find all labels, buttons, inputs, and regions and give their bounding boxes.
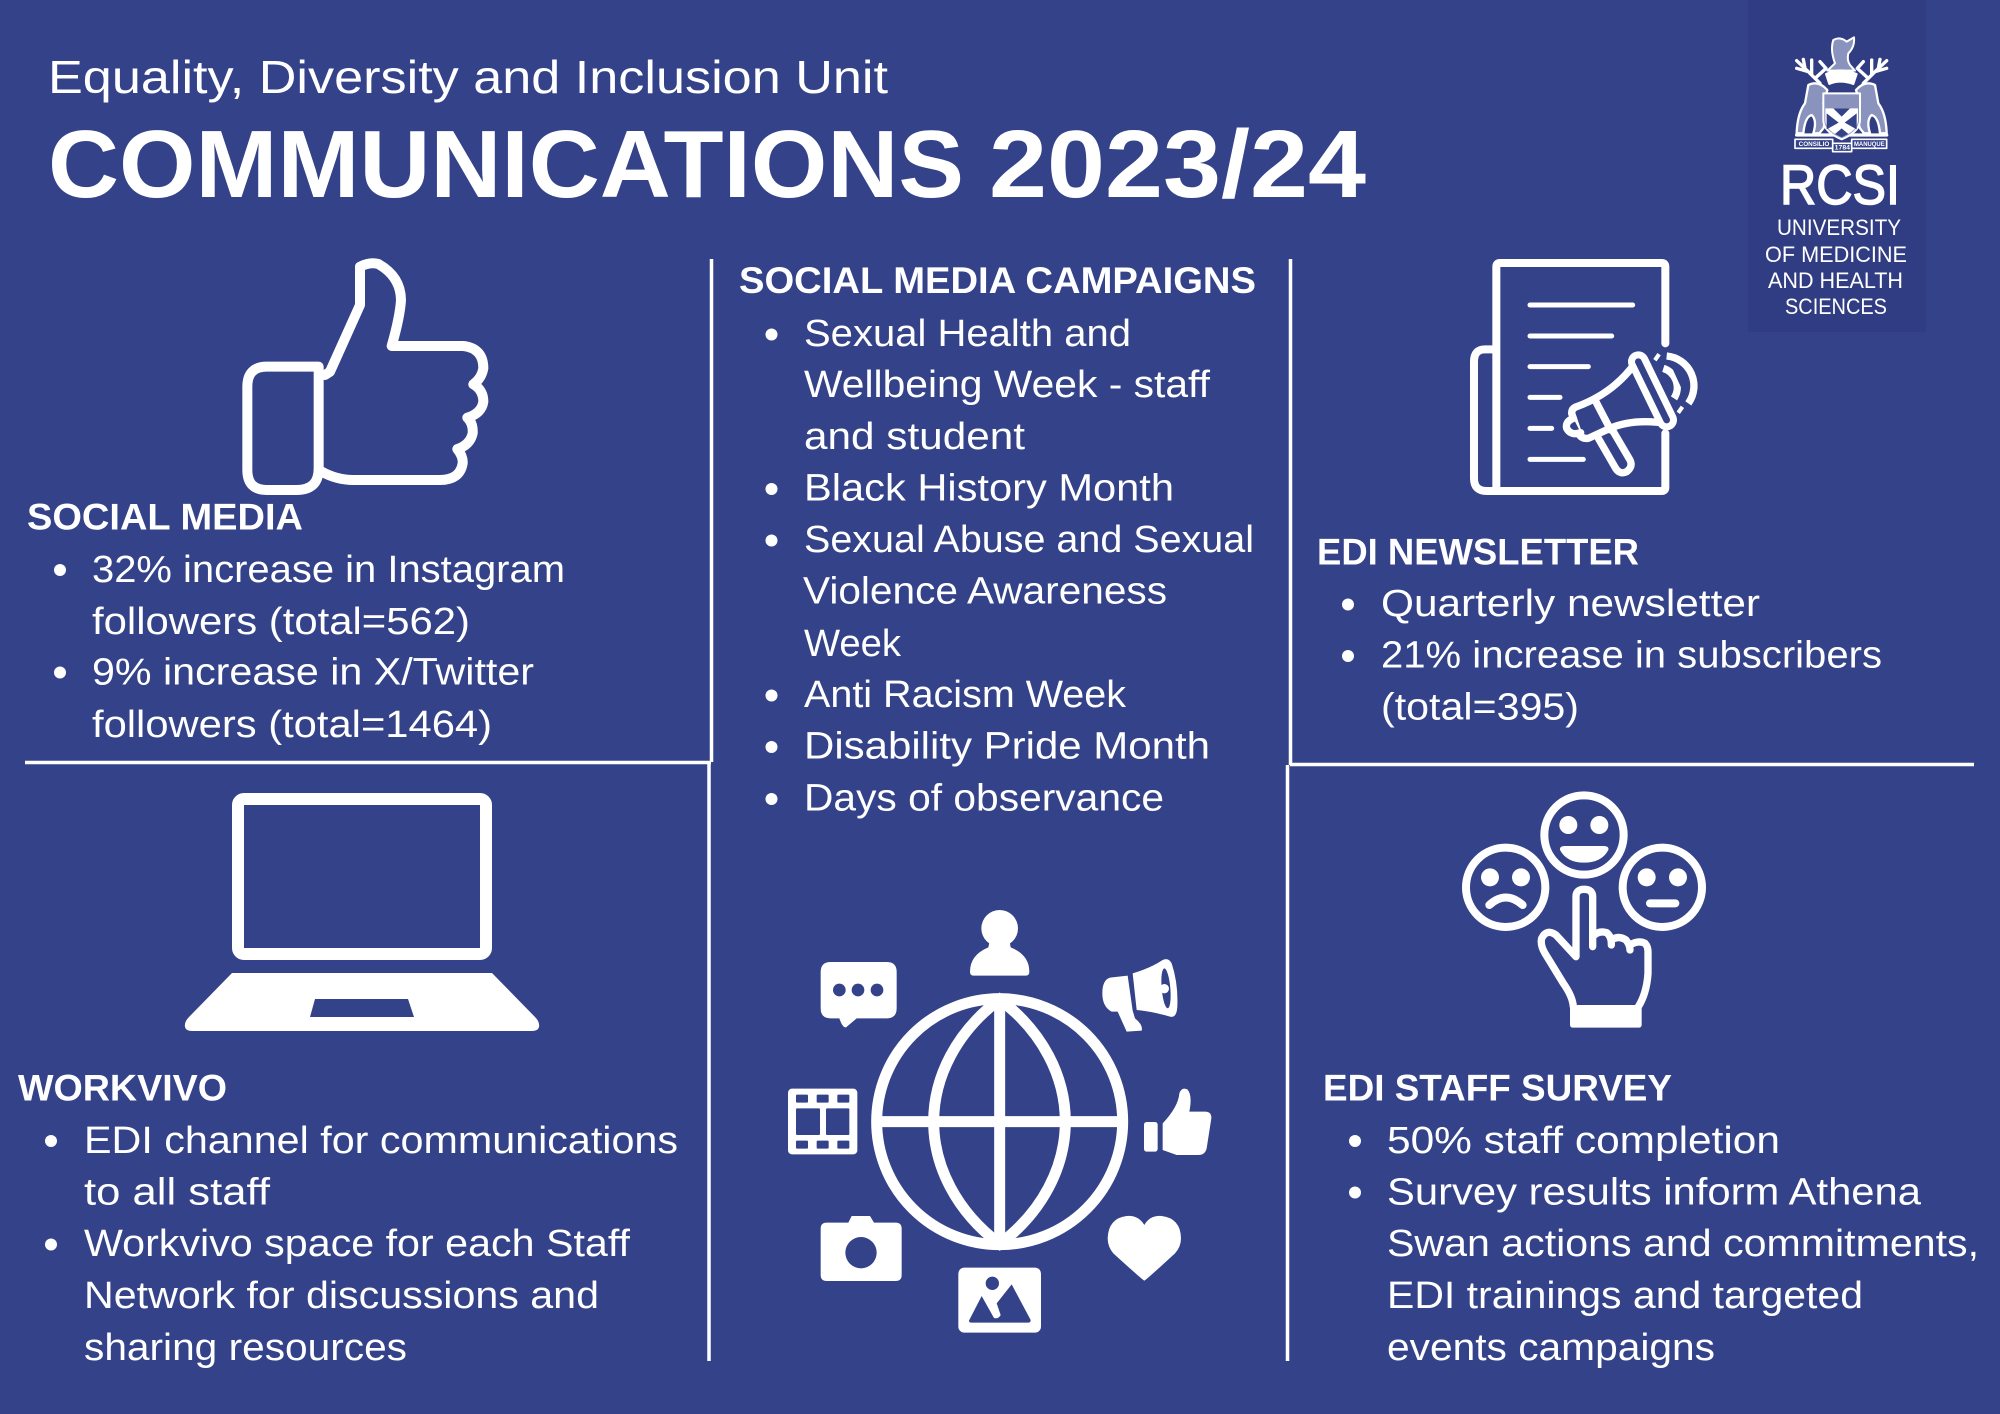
list: campaigns: and student	[804, 416, 1025, 458]
list: campaigns: Wellbeing Week - staff	[804, 364, 1210, 406]
list: newsletter: Quarterly newsletter	[1381, 583, 1760, 625]
list: survey: 50% staff completion	[1387, 1120, 1780, 1162]
icon: laptop	[185, 799, 539, 1031]
icon: RCSI crest	[1795, 37, 1887, 152]
list: campaigns: Disability Pride Month	[804, 726, 1210, 768]
list: campaigns: Days of observance	[804, 778, 1164, 820]
title block	[48, 51, 1366, 218]
icon: RCSI crest: MANUQUE	[1854, 141, 1885, 148]
icon: globe	[877, 999, 1123, 1245]
RCSI logo panel	[1748, 0, 1926, 332]
main title: COMMUNICATIONS	[48, 111, 964, 218]
list: newsletter: 21% increase in subscribers	[1381, 634, 1882, 676]
panel: social media campaigns	[739, 260, 1256, 1333]
icon: film strip	[788, 1089, 857, 1154]
icon: heart	[1108, 1216, 1181, 1281]
list: workvivo: EDI channel for communications	[84, 1120, 678, 1162]
panel: social media	[27, 263, 565, 746]
panel: EDI staff survey	[1323, 795, 1979, 1369]
icon: person	[970, 910, 1029, 976]
heading: EDI newsletter: EDI NEWSLETTER	[1317, 532, 1639, 572]
list: campaigns: Black History Month	[804, 468, 1174, 510]
heading: workvivo: WORKVIVO	[18, 1068, 227, 1108]
list: campaigns: Anti Racism Week	[804, 674, 1127, 716]
list: campaigns: Week	[804, 623, 902, 665]
list: workvivo: Network for discussions and	[84, 1275, 599, 1317]
panel: EDI newsletter	[1317, 263, 1882, 728]
list: survey: EDI trainings and targeted	[1387, 1275, 1863, 1317]
icon: chat bubble	[821, 962, 897, 1027]
subtitle: Equality, Diversity and Inclusion Unit	[48, 51, 888, 103]
heading: social media campaigns: SOCIAL MEDIA CAMPAIGNS	[739, 260, 1256, 301]
list: social media	[54, 549, 565, 746]
icon: thumbs up outline	[247, 263, 483, 490]
heading: social media: SOCIAL MEDIA	[27, 496, 303, 538]
list: campaigns: Violence Awareness	[803, 570, 1167, 612]
list: newsletter	[1342, 583, 1882, 728]
logo strapline: OF MEDICINE	[1765, 242, 1907, 267]
list: survey: events campaigns	[1387, 1327, 1715, 1369]
icon: RCSI crest: 1784	[1835, 145, 1851, 152]
list: campaigns	[766, 313, 1254, 820]
list: campaigns: Sexual Health and	[804, 313, 1131, 355]
logo strapline: UNIVERSITY	[1777, 215, 1901, 240]
list: social media: 9% increase in X/Twitter	[92, 652, 534, 694]
icon: globe with social icons	[788, 910, 1211, 1333]
icon: survey faces and pointing hand	[1466, 795, 1702, 1028]
list: survey: Swan actions and commitments,	[1387, 1223, 1979, 1265]
list: survey	[1349, 1120, 1979, 1369]
main title: 2023/24	[989, 111, 1366, 218]
list: workvivo: Workvivo space for each Staff	[84, 1223, 630, 1265]
logo wordmark: RCSI	[1780, 153, 1900, 216]
icon: small thumbs up	[1144, 1089, 1211, 1155]
list: workvivo: to all staff	[84, 1172, 270, 1214]
icon: picture	[958, 1268, 1041, 1333]
logo strapline: AND HEALTH	[1768, 268, 1903, 293]
list: social media: followers (total=1464)	[92, 704, 492, 746]
heading: EDI staff survey: EDI STAFF SURVEY	[1323, 1068, 1672, 1108]
list: campaigns: Sexual Abuse and Sexual	[804, 519, 1254, 561]
list: survey: Survey results inform Athena	[1387, 1172, 1922, 1214]
icon: camera	[821, 1216, 902, 1281]
list: newsletter: (total=395)	[1381, 686, 1579, 728]
icon: RCSI crest: CONSILIO	[1799, 141, 1829, 148]
logo strapline: SCIENCES	[1785, 294, 1887, 319]
list: workvivo	[45, 1120, 678, 1369]
list: social media: followers (total=562)	[92, 601, 470, 643]
panel: workvivo	[18, 799, 678, 1369]
list: workvivo: sharing resources	[84, 1327, 407, 1369]
icon: megaphone	[1102, 959, 1177, 1032]
list: social media: 32% increase in Instagram	[92, 549, 565, 591]
icon: newsletter with megaphone	[1474, 263, 1694, 491]
logo strapline	[1765, 215, 1907, 319]
